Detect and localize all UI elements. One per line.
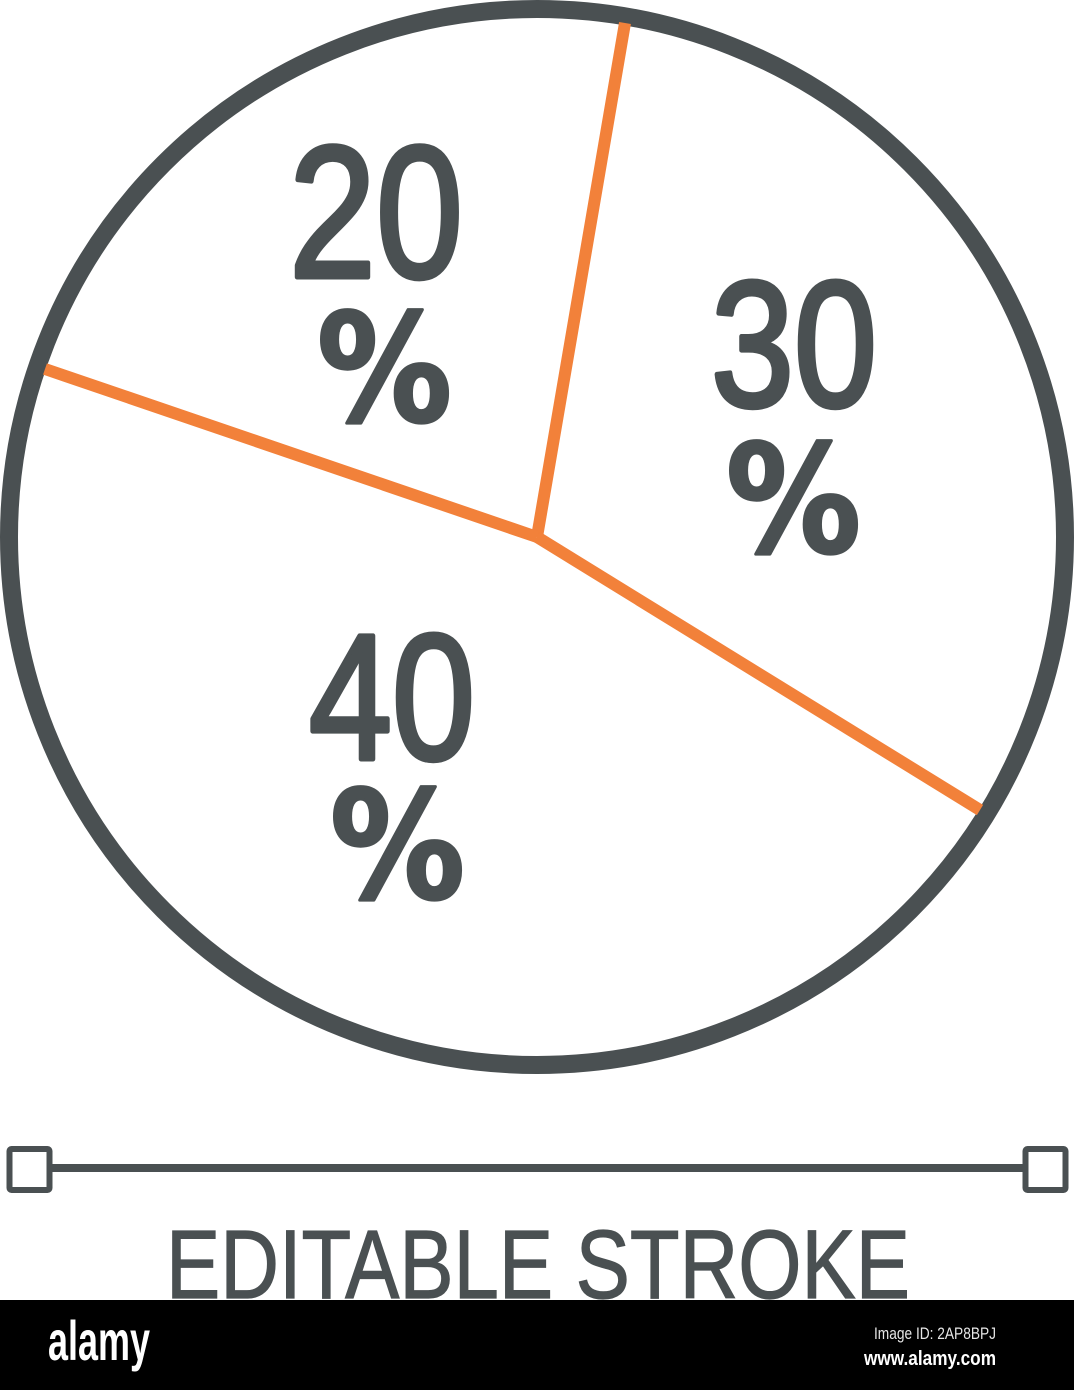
label: 20 percent <box>289 107 463 457</box>
label: 30 percent: % <box>726 414 861 588</box>
label: 40 percent: % <box>330 760 465 934</box>
pie outline <box>9 9 1065 1065</box>
label: 40 percent: 40 <box>309 597 475 797</box>
image id: Image ID: 2AP8BPJ <box>874 1324 996 1343</box>
editable stroke indicator <box>10 1149 1066 1190</box>
website: www.alamy.com <box>863 1348 996 1370</box>
label: 30 percent: 30 <box>711 244 877 444</box>
label: 40 percent <box>309 597 475 934</box>
caption: EDITABLE STROKE <box>166 1210 910 1319</box>
label: 20 percent: % <box>317 283 452 457</box>
slice dividers <box>45 23 980 810</box>
footer logo: alamy <box>48 1309 150 1372</box>
pie chart <box>9 9 1065 1065</box>
label: 20 percent: 20 <box>289 107 463 317</box>
label: 30 percent <box>711 244 877 588</box>
footer bar <box>0 1300 1074 1390</box>
